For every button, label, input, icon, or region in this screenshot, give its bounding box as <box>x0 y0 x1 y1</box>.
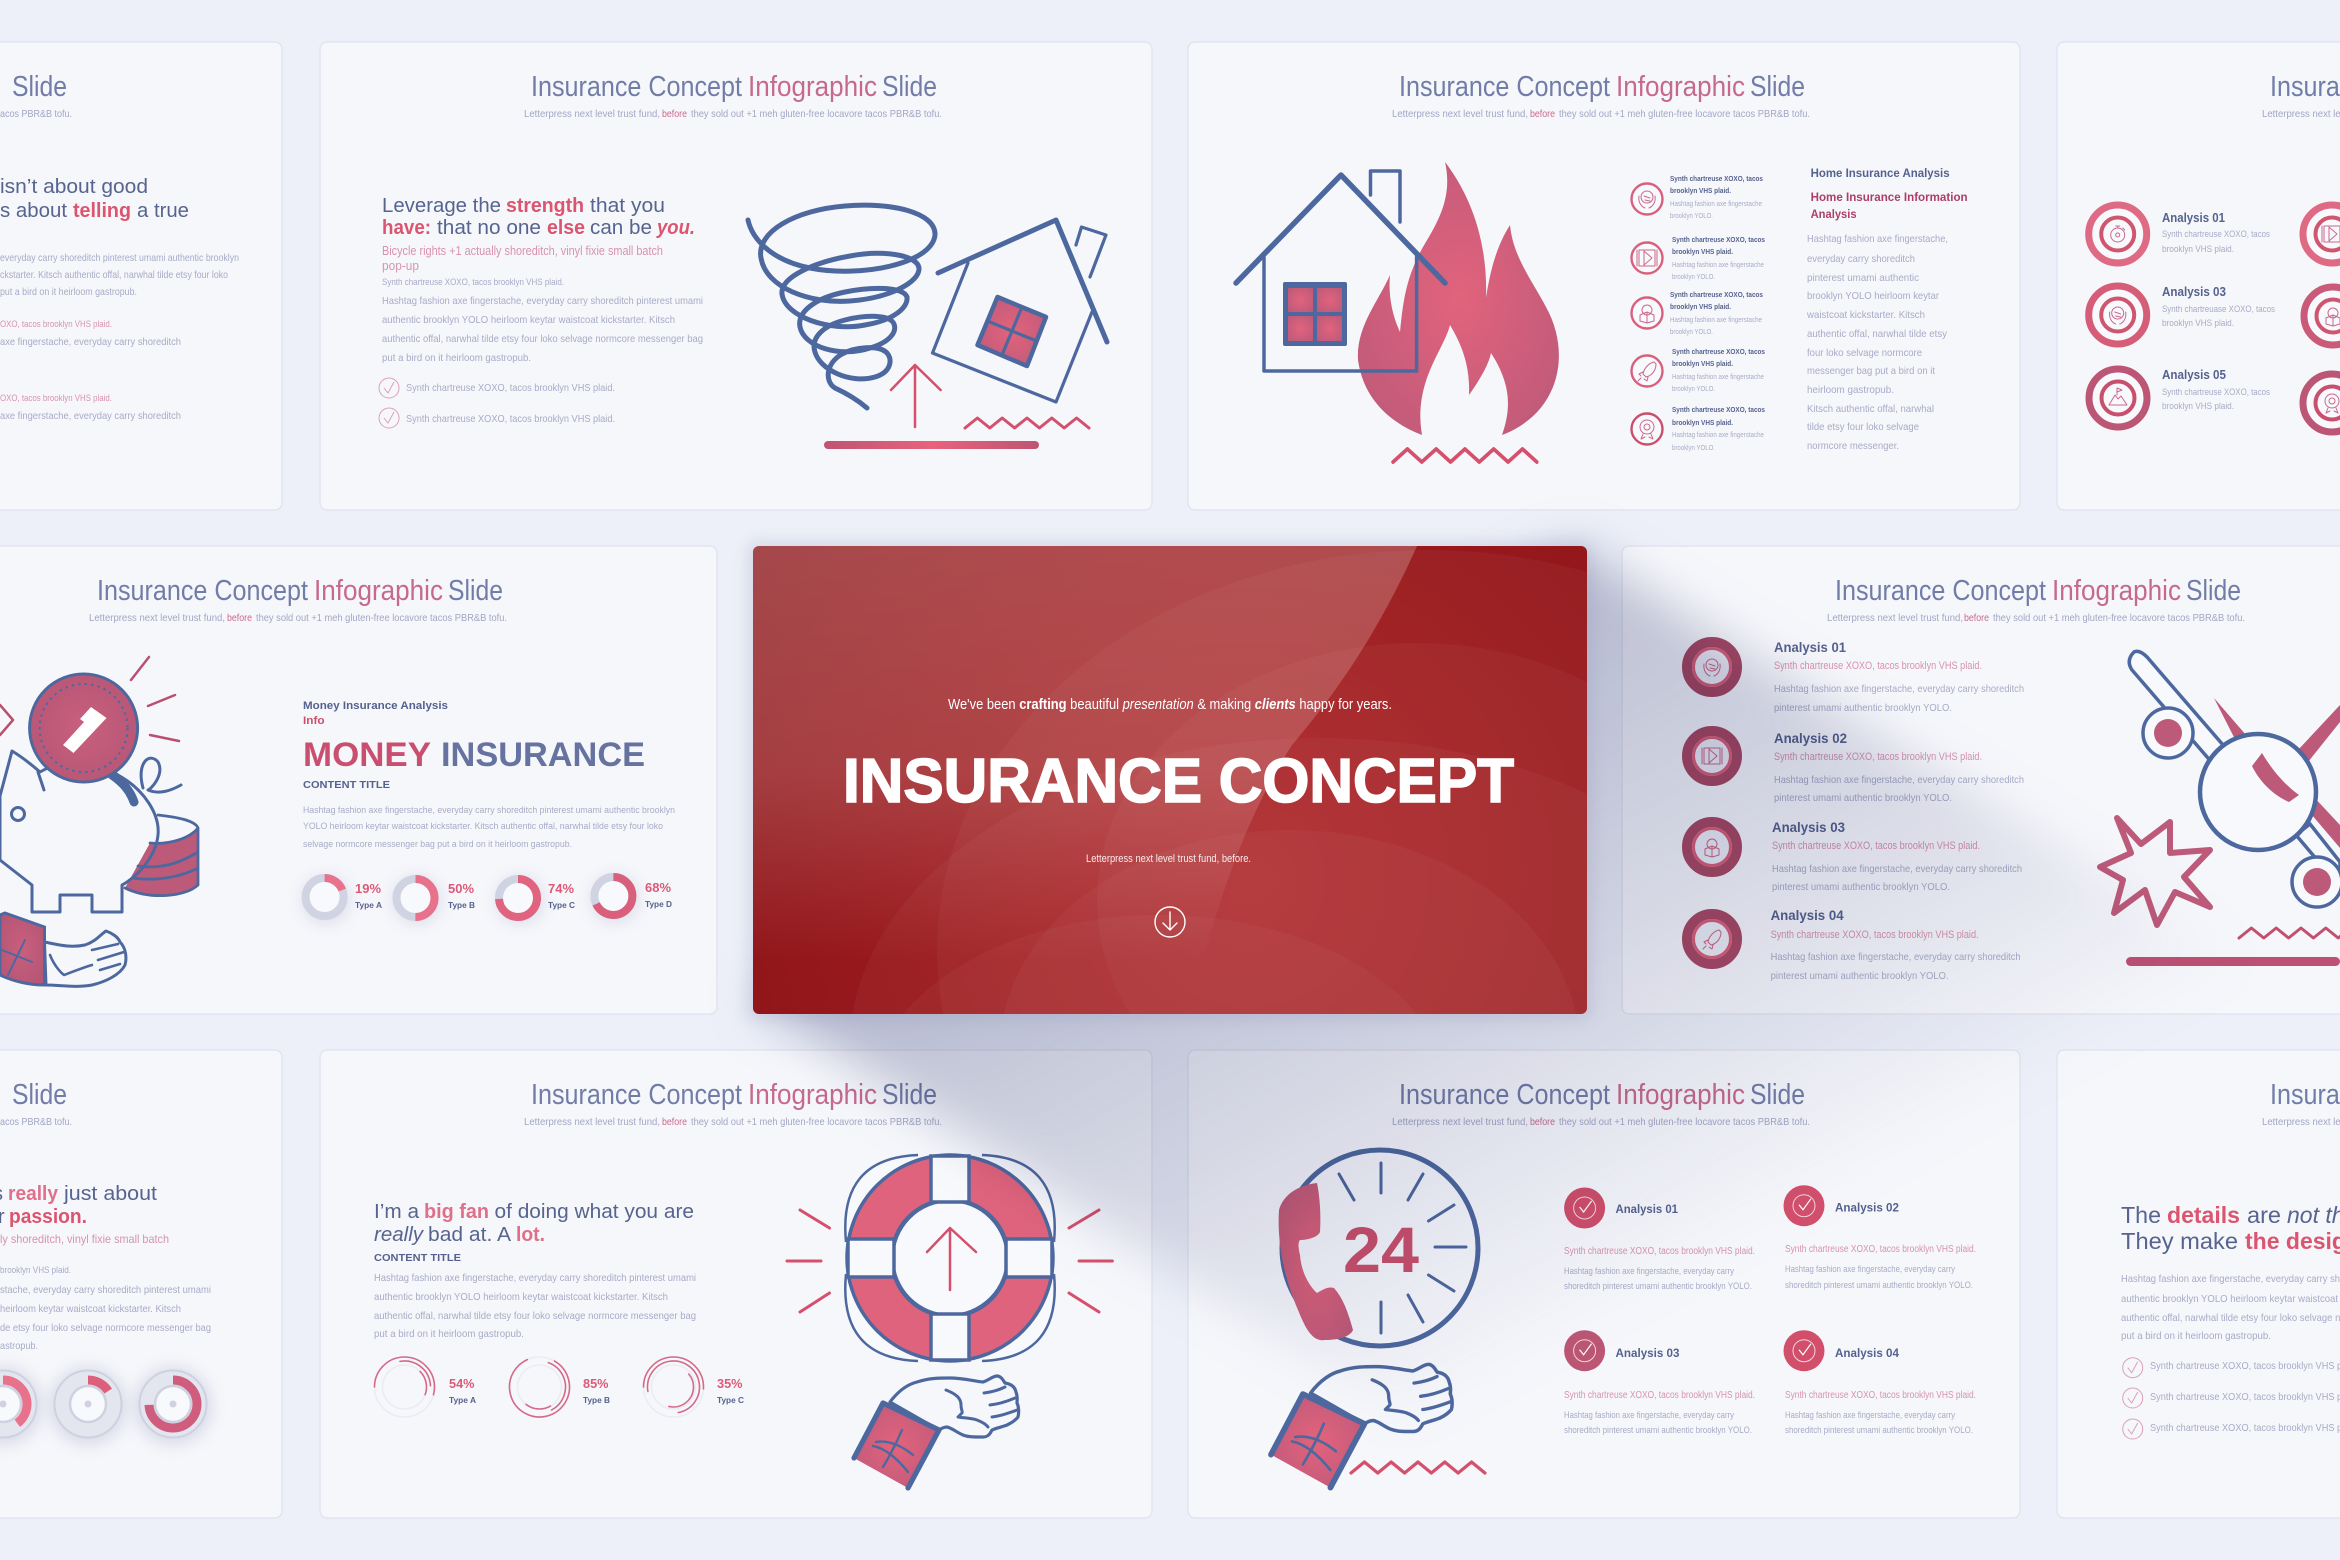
panel: tornado slide: authentic offal, narwhal tilde etsy four loko selvage normcore messenger bag <box>382 333 703 345</box>
panel: 24 hour support slide: Hashtag fashion axe fingerstache, everyday carry <box>1564 1410 1734 1421</box>
panel: target icons slide, top right: Synth chartreuase XOXO, tacos <box>2162 304 2275 315</box>
panel: money insurance slide: Slide <box>448 575 503 607</box>
panel: passion slide, bottom left: ly shoreditch, vinyl fixie small batch <box>0 1232 169 1246</box>
panel: lifebuoy slide: lot. <box>516 1224 545 1246</box>
panel: target icons slide, top right: brooklyn VHS plaid. <box>2162 244 2234 255</box>
panel: plane crash slide: Hashtag fashion axe fingerstache, everyday carry shoreditch <box>1771 951 2021 963</box>
panel: tornado slide: Leverage the <box>382 195 501 217</box>
panel: 24 hour support slide: Hashtag fashion axe fingerstache, everyday carry <box>1564 1266 1734 1277</box>
panel: target icons slide, top right: brooklyn VHS plaid. <box>2162 318 2234 329</box>
panel: money insurance slide: 74% <box>548 882 574 896</box>
panel: money insurance slide: they sold out +1 meh gluten-free locavore tacos PBR&B tofu. <box>256 612 507 624</box>
panel: tornado slide: can be <box>590 217 652 239</box>
panel: 24 hour support slide: they sold out +1 meh gluten-free locavore tacos PBR&B tofu. <box>1559 1116 1810 1128</box>
panel: fire slide: messenger bag put a bird on it <box>1807 365 1935 377</box>
panel: 24 hour support slide: Hashtag fashion axe fingerstache, everyday carry <box>1785 1264 1955 1275</box>
panel: tornado slide: they sold out +1 meh gluten-free locavore tacos PBR&B tofu. <box>691 108 942 120</box>
panel: story slide, top left: everyday carry shoreditch pinterest umami authentic brooklyn <box>0 252 239 264</box>
panel: fire slide: Insurance Concept <box>1399 71 1610 103</box>
panel: fire slide: heirloom gastropub. <box>1807 384 1894 396</box>
panel: fire slide: Analysis <box>1811 209 1857 221</box>
panel: fire slide: everyday carry shoreditch <box>1807 253 1915 265</box>
panel: 24 hour support slide: Analysis 01 <box>1616 1202 1678 1216</box>
panel: fire slide: authentic offal, narwhal tilde etsy <box>1807 328 1948 340</box>
panel: fire slide <box>1188 42 2020 510</box>
panel: fire slide: Synth chartreuse XOXO, tacos <box>1672 237 1765 244</box>
panel: lifebuoy slide: Hashtag fashion axe fingerstache, everyday carry shoreditch pinterest umami <box>374 1272 696 1284</box>
panel: 24 hour support slide: Slide <box>1750 1079 1805 1111</box>
panel: lifebuoy slide: of doing what you are <box>494 1201 694 1223</box>
panel: tornado slide: before <box>662 108 687 120</box>
panel: fire slide: Synth chartreuse XOXO, tacos <box>1672 349 1765 356</box>
panel: fire slide: brooklyn YOLO. <box>1670 329 1713 336</box>
panel: tornado slide: Letterpress next level trust fund, <box>524 108 660 120</box>
panel: fire slide: pinterest umami authentic <box>1807 272 1919 284</box>
panel: 24 hour support slide: Letterpress next level trust fund, <box>1392 1116 1528 1128</box>
panel: plane crash slide: pinterest umami authentic brooklyn YOLO. <box>1771 970 1949 982</box>
panel: centre title slide: Letterpress next level trust fund, before. <box>1086 853 1251 865</box>
panel: tornado slide: Bicycle rights +1 actually shoreditch, vinyl fixie small batch <box>382 244 663 258</box>
panel: 24 hour support slide: shoreditch pinterest umami authentic brooklyn YOLO. <box>1785 1425 1973 1436</box>
panel: lifebuoy slide: authentic brooklyn YOLO heirloom keytar waistcoat kickstarter. Kitsch <box>374 1291 668 1303</box>
panel: fire slide: Letterpress next level trust fund, <box>1392 108 1528 120</box>
panel: lifebuoy slide: Type C <box>717 1396 744 1405</box>
panel: lifebuoy slide: they sold out +1 meh gluten-free locavore tacos PBR&B tofu. <box>691 1116 942 1128</box>
panel: 24 hour support slide: Synth chartreuse XOXO, tacos brooklyn VHS plaid. <box>1564 1246 1755 1257</box>
panel: plane crash slide: Hashtag fashion axe fingerstache, everyday carry shoreditch <box>1774 683 2024 695</box>
panel: passion slide, bottom left: Slide <box>12 1079 67 1111</box>
panel: 24 hour support slide: Insurance Concept <box>1399 1079 1610 1111</box>
panel: story slide, top left: axe fingerstache, everyday carry shoreditch <box>0 336 181 348</box>
panel: lifebuoy slide: CONTENT TITLE <box>374 1252 461 1264</box>
panel: lifebuoy slide: Letterpress next level trust fund, <box>524 1116 660 1128</box>
panel: story slide, top left: ckstarter. Kitsch authentic offal, narwhal tilde etsy four loko <box>0 269 228 281</box>
panel: plane crash slide: pinterest umami authentic brooklyn YOLO. <box>1774 792 1952 804</box>
panel: lifebuoy slide: Type B <box>583 1396 610 1405</box>
panel: money insurance slide: CONTENT TITLE <box>303 779 390 791</box>
panel: tornado slide: strength <box>506 195 584 217</box>
panel: 24 hour support slide: Synth chartreuse XOXO, tacos brooklyn VHS plaid. <box>1785 1244 1976 1255</box>
panel: fire slide: Hashtag fashion axe fingerstache <box>1670 317 1762 324</box>
panel: lifebuoy slide: I’m a <box>374 1201 420 1223</box>
panel: money insurance slide: YOLO heirloom keytar waistcoat kickstarter. Kitsch authentic offal, narwhal tilde etsy four loko <box>303 821 663 832</box>
panel: target icons slide, top right: Synth chartreuse XOXO, tacos <box>2162 387 2270 398</box>
panel: story slide, top left <box>0 42 282 510</box>
panel: story slide, top left: a true <box>137 200 189 222</box>
panel: plane crash slide: Hashtag fashion axe fingerstache, everyday carry shoreditch <box>1774 774 2024 786</box>
panel: fire slide: Hashtag fashion axe fingerstache <box>1672 432 1764 439</box>
panel: plane crash slide: Synth chartreuse XOXO, tacos brooklyn VHS plaid. <box>1772 840 1980 852</box>
panel: lifebuoy slide: put a bird on it heirloom gastropub. <box>374 1328 524 1340</box>
panel: story slide, top left: OXO, tacos brooklyn VHS plaid. <box>0 393 112 404</box>
panel: fire slide: Hashtag fashion axe fingerstache <box>1670 201 1762 208</box>
panel: story slide, top left: isn’t about good <box>0 176 148 198</box>
panel: centre title slide: INSURANCE CONCEPT <box>843 747 1514 816</box>
panel: passion slide, bottom left: brooklyn VHS plaid. <box>0 1265 71 1276</box>
panel: fire slide: Home Insurance Analysis <box>1811 168 1950 180</box>
panel: money insurance slide: Type A <box>355 901 382 910</box>
panel: 24 hour support slide: shoreditch pinterest umami authentic brooklyn YOLO. <box>1564 1281 1752 1292</box>
panel: tornado slide: you. <box>656 217 695 239</box>
panel: tornado slide: have: <box>382 217 431 239</box>
panel: lifebuoy slide: 35% <box>717 1377 742 1391</box>
panel: plane crash slide: Letterpress next level trust fund, <box>1827 612 1963 624</box>
panel: plane crash slide: Insurance Concept <box>1835 575 2046 607</box>
panel: lifebuoy slide <box>320 1050 1152 1518</box>
panel: story slide, top left: s about <box>0 200 67 222</box>
panel: fire slide: Synth chartreuse XOXO, tacos <box>1670 176 1763 183</box>
panel: tornado slide <box>320 42 1152 510</box>
panel: details slide, bottom right: put a bird on it heirloom gastropub. <box>2121 1330 2271 1342</box>
panel: plane crash slide: Analysis 02 <box>1774 731 1847 746</box>
panel: fire slide: before <box>1530 108 1555 120</box>
panel: fire slide: brooklyn VHS plaid. <box>1670 304 1731 311</box>
panel: fire slide: Slide <box>1750 71 1805 103</box>
panel: money insurance slide: Type B <box>448 901 475 910</box>
panel: fire slide: Kitsch authentic offal, narwhal <box>1807 403 1934 415</box>
panel: fire slide: Hashtag fashion axe fingerstache <box>1672 262 1764 269</box>
panel: fire slide: brooklyn VHS plaid. <box>1672 249 1733 256</box>
panel: passion slide, bottom left: just about <box>63 1183 157 1205</box>
panel: tornado slide: Slide <box>882 71 937 103</box>
panel: money insurance slide: Type D <box>645 900 672 909</box>
panel: target icons slide, top right: Analysis 03 <box>2162 285 2226 299</box>
panel: money insurance slide <box>0 546 717 1014</box>
panel: 24 hour support slide: 24 <box>1343 1214 1419 1286</box>
panel: lifebuoy slide: 85% <box>583 1377 608 1391</box>
panel: 24 hour support slide: before <box>1530 1116 1555 1128</box>
panel: plane crash slide: pinterest umami authentic brooklyn YOLO. <box>1772 881 1950 893</box>
panel: money insurance slide: MONEY <box>303 736 431 774</box>
panel: passion slide, bottom left <box>0 1050 282 1518</box>
panel: target icons slide, top right: Synth chartreuse XOXO, tacos <box>2162 229 2270 240</box>
panel: fire slide: Synth chartreuse XOXO, tacos <box>1670 292 1763 299</box>
panel: plane crash slide <box>1622 546 2340 1014</box>
panel: plane crash slide: Slide <box>2186 575 2241 607</box>
panel: fire slide: brooklyn VHS plaid. <box>1670 188 1731 195</box>
panel: fire slide: Infographic <box>1616 71 1745 103</box>
panel: tornado slide: pop-up <box>382 259 419 273</box>
panel: target icons slide, top right: Analysis 05 <box>2162 368 2226 382</box>
panel: 24 hour support slide: Synth chartreuse XOXO, tacos brooklyn VHS plaid. <box>1564 1390 1755 1401</box>
panel: plane crash slide: Analysis 03 <box>1772 820 1845 835</box>
panel: money insurance slide: 68% <box>645 881 671 895</box>
panel: plane crash slide: before <box>1964 612 1989 624</box>
panel: passion slide, bottom left: stache, everyday carry shoreditch pinterest umami <box>0 1284 211 1296</box>
panel: lifebuoy slide: Slide <box>882 1079 937 1111</box>
panel: 24 hour support slide: Analysis 04 <box>1835 1346 1899 1360</box>
panel: fire slide: brooklyn YOLO. <box>1670 213 1713 220</box>
panel: 24 hour support slide: shoreditch pinterest umami authentic brooklyn YOLO. <box>1564 1425 1752 1436</box>
panel: tornado slide: authentic brooklyn YOLO heirloom keytar waistcoat kickstarter. Kitsch <box>382 314 675 326</box>
panel: 24 hour support slide: Analysis 02 <box>1835 1201 1899 1215</box>
panel: 24 hour support slide: Analysis 03 <box>1616 1346 1680 1360</box>
panel: fire slide: Hashtag fashion axe fingerstache <box>1672 374 1764 381</box>
panel: fire slide: brooklyn VHS plaid. <box>1672 420 1733 427</box>
panel: money insurance slide: selvage normcore messenger bag put a bird on it heirloom gastropub. <box>303 839 572 850</box>
panel: money insurance slide: Letterpress next level trust fund, <box>89 612 225 624</box>
panel: fire slide: Home Insurance Information <box>1811 192 1968 204</box>
panel: money insurance slide: before <box>227 612 252 624</box>
panel: centre title slide: We've been crafting beautiful presentation & making clients happy for years. <box>948 696 1392 713</box>
panel: fire slide: tilde etsy four loko selvage <box>1807 421 1919 433</box>
panel: lifebuoy slide: Insurance Concept <box>531 1079 742 1111</box>
panel: money insurance slide: Info <box>303 715 325 727</box>
panel: story slide, top left: OXO, tacos brooklyn VHS plaid. <box>0 319 112 330</box>
panel: lifebuoy slide: bad at. A <box>428 1224 512 1246</box>
panel: passion slide, bottom left: passion. <box>9 1206 87 1228</box>
panel: tornado slide: Infographic <box>748 71 877 103</box>
panel: 24 hour support slide: Synth chartreuse XOXO, tacos brooklyn VHS plaid. <box>1785 1390 1976 1401</box>
panel: tornado slide: Synth chartreuse XOXO, tacos brooklyn VHS plaid. <box>382 277 564 288</box>
panel: fire slide: brooklyn VHS plaid. <box>1672 361 1733 368</box>
panel: lifebuoy slide: Infographic <box>748 1079 877 1111</box>
panel: fire slide: brooklyn YOLO. <box>1672 386 1715 393</box>
panel: lifebuoy slide: Type A <box>449 1396 476 1405</box>
panel: passion slide, bottom left: de etsy four loko selvage normcore messenger bag <box>0 1322 211 1334</box>
panel: fire slide: Hashtag fashion axe fingerstache, <box>1807 233 1948 245</box>
panel: story slide, top left: telling <box>73 200 131 222</box>
panel: plane crash slide: Synth chartreuse XOXO, tacos brooklyn VHS plaid. <box>1771 929 1979 941</box>
panel: centre title slide <box>744 538 1593 1022</box>
panel: plane crash slide: Synth chartreuse XOXO, tacos brooklyn VHS plaid. <box>1774 660 1982 672</box>
panel: plane crash slide: Analysis 01 <box>1774 640 1846 655</box>
panel: fire slide: brooklyn YOLO heirloom keytar <box>1807 290 1939 302</box>
panel: 24 hour support slide: Infographic <box>1616 1079 1745 1111</box>
panel: tornado slide: Synth chartreuse XOXO, tacos brooklyn VHS plaid. <box>406 413 615 425</box>
panel: fire slide: brooklyn YOLO. <box>1672 274 1715 281</box>
panel: money insurance slide: INSURANCE <box>441 736 645 774</box>
panel: fire slide: Synth chartreuse XOXO, tacos <box>1672 407 1765 414</box>
panel: fire slide: they sold out +1 meh gluten-free locavore tacos PBR&B tofu. <box>1559 108 1810 120</box>
panel: money insurance slide: Hashtag fashion axe fingerstache, everyday carry shoreditch pinterest umami authentic brooklyn <box>303 805 675 816</box>
panel: fire slide: normcore messenger. <box>1807 440 1899 452</box>
panel: 24 hour support slide: Hashtag fashion axe fingerstache, everyday carry <box>1785 1410 1955 1421</box>
long shadow of the centre slide <box>753 546 2240 1420</box>
panel: plane crash slide: Infographic <box>2052 575 2181 607</box>
panel: passion slide, bottom left: heirloom keytar waistcoat kickstarter. Kitsch <box>0 1303 181 1315</box>
panel: plane crash slide: pinterest umami authentic brooklyn YOLO. <box>1774 702 1952 714</box>
panel: money insurance slide: Insurance Concept <box>97 575 308 607</box>
panel: lifebuoy slide: authentic offal, narwhal tilde etsy four loko selvage normcore messenger bag <box>374 1310 696 1322</box>
panel: passion slide, bottom left: acos PBR&B tofu. <box>0 1116 72 1128</box>
panel: lifebuoy slide: really <box>374 1224 424 1246</box>
panel: tornado slide: Synth chartreuse XOXO, tacos brooklyn VHS plaid. <box>406 382 615 394</box>
panel: details slide, bottom right: They make <box>2121 1228 2238 1254</box>
panel: passion slide, bottom left: astropub. <box>0 1340 38 1352</box>
panel: plane crash slide: Hashtag fashion axe fingerstache, everyday carry shoreditch <box>1772 863 2022 875</box>
panel: 24 hour support slide: shoreditch pinterest umami authentic brooklyn YOLO. <box>1785 1280 1973 1291</box>
panel: money insurance slide: Infographic <box>314 575 443 607</box>
panel: details slide, bottom right: The <box>2121 1202 2161 1228</box>
panel: 24 hour support slide <box>1188 1050 2020 1518</box>
panel: passion slide, bottom left: really <box>8 1183 59 1205</box>
panel: target icons slide, top right: brooklyn VHS plaid. <box>2162 401 2234 412</box>
panel: story slide, top left: put a bird on it heirloom gastropub. <box>0 286 137 298</box>
panel: fire slide: four loko selvage normcore <box>1807 347 1922 359</box>
panel: fire slide: waistcoat kickstarter. Kitsch <box>1806 309 1925 321</box>
panel: lifebuoy slide: big fan <box>424 1201 489 1223</box>
panel: tornado slide: put a bird on it heirloom gastropub. <box>382 352 531 364</box>
panel: tornado slide: else <box>547 217 585 239</box>
panel: tornado slide: Hashtag fashion axe fingerstache, everyday carry shoreditch pinterest umami <box>382 295 703 307</box>
panel: details slide, bottom right <box>2057 1050 2340 1518</box>
panel: details slide, bottom right: are <box>2247 1202 2281 1228</box>
panel: lifebuoy slide: 54% <box>449 1377 474 1391</box>
panel: details slide, bottom right: details <box>2167 1202 2240 1228</box>
panel: money insurance slide: Type C <box>548 901 575 910</box>
panel: tornado slide: that you <box>590 195 665 217</box>
panel: money insurance slide: 50% <box>448 882 474 896</box>
panel: plane crash slide: they sold out +1 meh gluten-free locavore tacos PBR&B tofu. <box>1993 612 2245 624</box>
panel: plane crash slide: Synth chartreuse XOXO, tacos brooklyn VHS plaid. <box>1774 751 1982 763</box>
panel: target icons slide, top right <box>2057 42 2340 510</box>
panel: money insurance slide: 19% <box>355 882 381 896</box>
panel: story slide, top left: acos PBR&B tofu. <box>0 108 72 120</box>
panel: lifebuoy slide: before <box>662 1116 687 1128</box>
panel: plane crash slide: Analysis 04 <box>1771 908 1844 923</box>
panel: story slide, top left: axe fingerstache, everyday carry shoreditch <box>0 410 181 422</box>
panel: target icons slide, top right: Analysis 01 <box>2162 211 2225 225</box>
panel: tornado slide: that no one <box>437 217 541 239</box>
panel: fire slide: brooklyn YOLO. <box>1672 445 1715 452</box>
panel: tornado slide: Insurance Concept <box>531 71 742 103</box>
panel: story slide, top left: Slide <box>12 71 67 103</box>
panel: money insurance slide: Money Insurance Analysis <box>303 700 448 712</box>
